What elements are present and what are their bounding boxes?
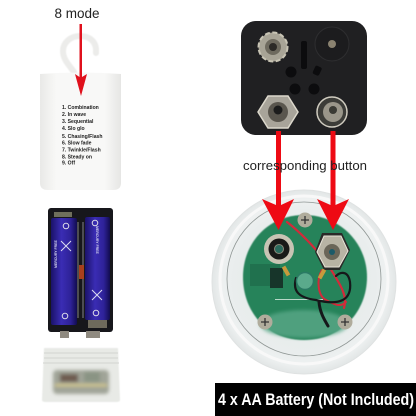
terminals <box>60 331 100 338</box>
arrow: mode <box>75 24 87 96</box>
lid body <box>42 348 120 402</box>
centre ring <box>296 272 314 290</box>
mode list: 1. Combination <box>62 105 99 111</box>
heading: 8 mode: 8 mode <box>54 6 100 21</box>
mode list: 2. In wave <box>62 112 86 118</box>
mode list: 8. Steady on <box>62 154 92 160</box>
label: corresponding button: corresponding button <box>243 158 367 173</box>
icon: vent circle <box>315 27 349 61</box>
icon: round contact <box>264 234 294 264</box>
mode list: 4. Slo glo <box>62 126 85 132</box>
holder frame <box>48 208 113 332</box>
moulded socket details <box>286 41 322 94</box>
banner: battery note <box>215 383 416 416</box>
icon: screws <box>258 212 352 330</box>
icon: hanging hook <box>63 36 96 72</box>
panel: screw lid <box>42 348 120 402</box>
panel: circular switch base <box>212 190 396 374</box>
battery right: MERCURY FREE <box>95 226 99 254</box>
controller body <box>40 72 121 190</box>
mode list: 6. Slow fade <box>62 140 92 146</box>
panel: battery holder <box>48 208 113 338</box>
icon: hex terminal <box>258 96 298 128</box>
solder tabs <box>282 266 326 279</box>
clear housing <box>212 190 396 374</box>
icon: flower nut <box>258 32 288 62</box>
arrow: right button <box>317 131 349 230</box>
plate <box>241 21 367 135</box>
panel: battery contact plate <box>241 21 367 135</box>
panel: mode controller <box>40 6 121 190</box>
lid electronics <box>53 370 109 394</box>
mode list: 5. Chasing/Flash <box>62 134 102 140</box>
mode list: 7. Twinkle/Flash <box>62 148 101 154</box>
mode list: 3. Sequential <box>62 119 94 125</box>
icon: hex contact <box>315 233 350 270</box>
icon: round terminal <box>317 97 347 127</box>
mode list <box>62 105 102 166</box>
battery left: MERCURY FREE <box>54 240 58 268</box>
arrow: left button <box>262 131 294 230</box>
mode list: 9. Off <box>62 160 75 166</box>
wires <box>287 222 350 326</box>
circuit board <box>243 215 367 340</box>
